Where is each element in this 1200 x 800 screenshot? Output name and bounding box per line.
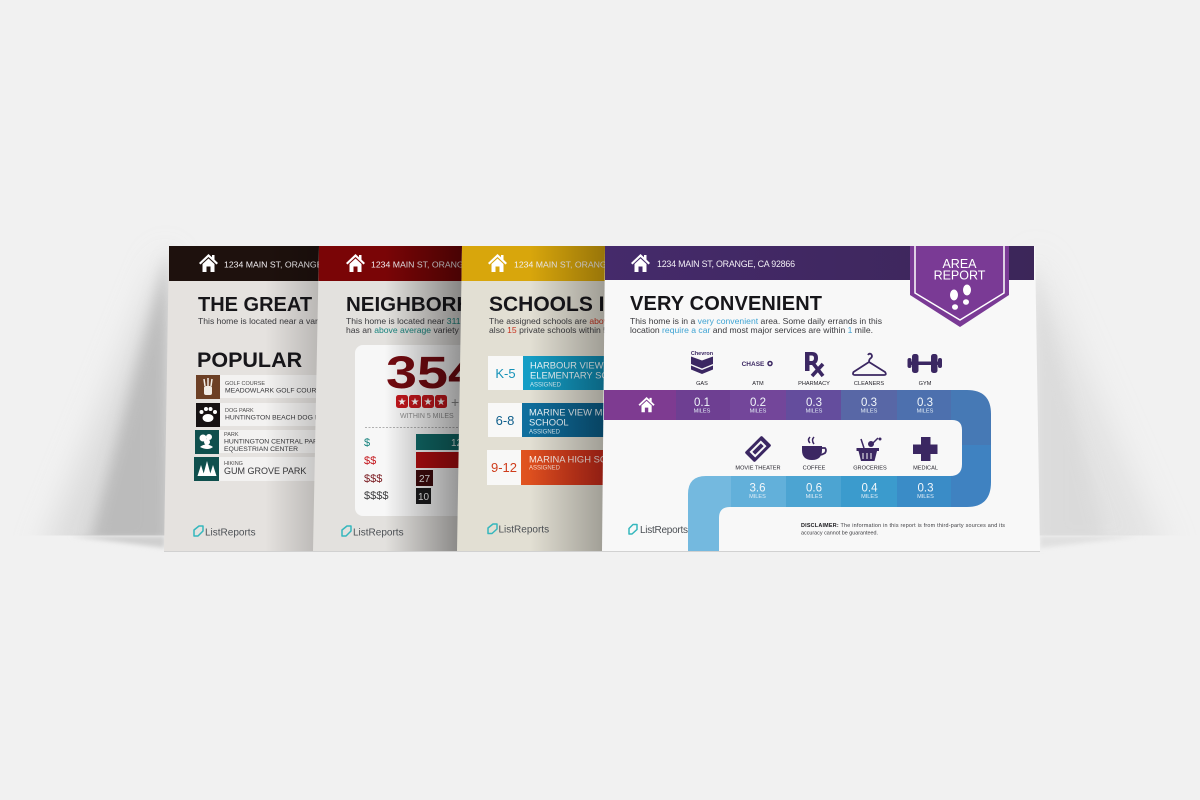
list: popular places: PARK — [224, 432, 239, 438]
card header: neighborhood — [318, 246, 487, 281]
intro text: schools: The assigned schools are above average — [489, 316, 646, 326]
intro text: location require a car and most major services are within 1 mile. — [630, 325, 873, 335]
icon: pharmacy rx — [805, 352, 823, 376]
icon: chevron gas — [691, 351, 714, 374]
bar chart: price levels: 27 — [419, 474, 430, 485]
rating stars: ★ — [437, 397, 446, 408]
rating stars: ★ — [424, 397, 433, 408]
card header: outdoors: 1234 MAIN ST, ORANGE, CA — [224, 260, 340, 270]
list: popular places: GOLF COURSE — [225, 381, 265, 387]
card header: area report — [605, 246, 1034, 280]
school row: 6-8 — [488, 403, 630, 437]
rating stars: ★ — [411, 397, 420, 408]
bar chart: price levels — [364, 434, 486, 504]
icon: coffee — [802, 437, 826, 460]
school row: K-5: K-5 — [495, 366, 516, 381]
icon: dumbbell — [908, 354, 942, 373]
heading: very convenient: VERY CONVENIENT — [630, 293, 822, 315]
card header: outdoors — [169, 246, 340, 281]
card header: area report: 1234 MAIN ST, ORANGE, CA 92866 — [657, 259, 795, 269]
distances row two: MILES — [749, 494, 766, 500]
wall shadows — [40, 246, 1170, 560]
icon: park — [195, 430, 219, 454]
icon: trees — [194, 457, 219, 481]
school row: 6-8: 6-8 — [496, 413, 514, 428]
distances row one: MILES — [806, 408, 823, 414]
list: popular places: DOG PARK — [225, 408, 254, 414]
label: medical: MEDICAL — [913, 466, 938, 472]
distances row two: 3.6 — [750, 482, 766, 494]
bar chart: price levels: $$$ — [364, 473, 382, 485]
icon: golf bag — [196, 375, 220, 399]
bar chart: price levels: $$$$ — [364, 490, 388, 502]
logo: listreports: ListReports — [205, 528, 256, 538]
icon: home marker — [638, 397, 655, 412]
distances row two: 0.3 — [918, 482, 934, 494]
distances row one: MILES — [750, 408, 767, 414]
distances row two: MILES — [806, 494, 823, 500]
distances row one: 0.3 — [806, 397, 822, 409]
icon: paw — [196, 403, 220, 427]
disclaimer: DISCLAIMER: The information in this report is from third-party sources and its — [801, 523, 1005, 529]
distances row one: 0.1 — [694, 397, 710, 409]
bar chart: price levels: 124 — [451, 438, 468, 449]
panel: restaurant stats — [355, 345, 486, 516]
intro text line two: has an above average variety of options — [346, 325, 498, 335]
distances row one: 0.3 — [917, 397, 933, 409]
school row: K-5: HARBOUR VIEW — [530, 360, 604, 370]
school row: 6-8: SCHOOL — [529, 416, 569, 428]
distances row one: MILES — [694, 408, 711, 414]
icon: movie ticket — [745, 436, 771, 462]
school row: 9-12 — [487, 450, 633, 485]
mockup scene — [46, 246, 1154, 552]
rating stars: ★ — [398, 397, 407, 408]
bar chart: price levels: $$ — [364, 455, 376, 467]
heading: popular: POPULAR — [197, 348, 303, 372]
panel: outdoors card — [164, 246, 433, 551]
icon: groceries basket — [856, 438, 882, 461]
intro text: This home is in a very convenient area. Some daily errands in this — [630, 316, 882, 326]
school row: K-5: ASSIGNED — [530, 382, 562, 388]
icon: hanger — [853, 354, 886, 375]
school row: K-5: ELEMENTARY SCHOOL — [530, 370, 635, 380]
bar chart: price levels: $ — [364, 437, 370, 449]
list: popular places: MEADOWLARK GOLF COURSE — [225, 388, 326, 394]
icon: chevron gas: Chevron — [691, 351, 714, 357]
intro text: outdoors: This home is located near a variety of — [198, 316, 341, 326]
rating stars — [396, 394, 459, 410]
list: popular places: HUNTINGTON BEACH DOG PARK — [225, 414, 333, 422]
distances row two: MILES — [861, 494, 878, 500]
school row: 9-12: MARINA HIGH SCHOOL — [529, 454, 633, 464]
logo: listreports: ListReports — [353, 528, 404, 538]
card header: neighborhood: 1234 MAIN ST, ORANGE, CA — [371, 260, 487, 270]
disclaimer — [801, 523, 1005, 536]
intro text — [630, 316, 882, 335]
card header: schools — [462, 246, 630, 281]
badge: area report ribbon — [910, 246, 1009, 327]
label: movie theater: MOVIE THEATER — [735, 466, 781, 472]
list: popular places: HUNTINGTON CENTRAL PARK — [224, 438, 323, 446]
distances row two: 0.6 — [806, 482, 822, 494]
distances row two — [749, 482, 934, 500]
label: cleaners: CLEANERS — [854, 381, 884, 387]
disclaimer: accuracy cannot be guaranteed. — [801, 530, 878, 536]
school row: 6-8: MARINE VIEW MIDDLE — [529, 406, 630, 418]
badge: area report ribbon: AREA — [942, 257, 977, 271]
bar chart: price levels: 10 — [418, 492, 429, 503]
school row: 6-8: ASSIGNED — [529, 430, 561, 436]
list: popular places — [194, 375, 333, 481]
service path: distance band — [600, 385, 996, 555]
heading: schools: SCHOOLS IN ORANGE — [489, 293, 718, 316]
label: atm: ATM — [752, 381, 764, 387]
label: pharmacy: PHARMACY — [798, 381, 830, 387]
card header: schools: 1234 MAIN ST, ORANGE, CA — [514, 260, 630, 270]
school row: 9-12: ASSIGNED — [529, 466, 561, 472]
label: groceries: GROCERIES — [853, 466, 887, 472]
distances row two: 0.4 — [862, 482, 878, 494]
icon: chase atm: CHASE — [742, 361, 765, 368]
label: gym: GYM — [919, 381, 932, 387]
caption: within 5 miles: WITHIN 5 MILES — [400, 413, 454, 420]
panel: schools card — [457, 246, 718, 551]
number: 354: 354 — [386, 347, 479, 398]
panel: neighborhood card — [313, 246, 523, 551]
distances row two: MILES — [917, 494, 934, 500]
logo: listreports: ListReports — [640, 525, 688, 536]
heading: neighborhood: NEIGHBORHOOD — [346, 293, 518, 316]
icon: medical cross — [913, 437, 938, 461]
badge: area report ribbon: REPORT — [934, 268, 986, 282]
distances row one — [694, 397, 934, 414]
label: gas: GAS — [696, 381, 708, 387]
distances row one: MILES — [861, 408, 878, 414]
label: coffee: COFFEE — [803, 466, 826, 472]
intro text: neighborhood: This home is located near 311 restaurants and — [346, 316, 523, 326]
rating stars: + — [451, 394, 459, 410]
distances row one: 0.2 — [750, 397, 766, 409]
school row: K-5 — [488, 356, 635, 390]
icon: footprints — [950, 284, 971, 310]
distances row one: MILES — [917, 408, 934, 414]
heading: the great outdoors: THE GREAT OUTDOORS — [198, 294, 433, 316]
list: popular places: HIKING — [224, 461, 243, 467]
panel: very convenient card — [600, 246, 1040, 555]
list: popular places: GUM GROVE PARK — [224, 466, 306, 476]
logo: listreports: ListReports — [498, 524, 549, 536]
school row: 9-12: 9-12 — [491, 460, 517, 475]
list: popular places: EQUESTRIAN CENTER — [224, 446, 298, 453]
intro text line two: also 15 private schools within 5 miles — [489, 325, 630, 335]
distances row one: 0.3 — [861, 397, 877, 409]
